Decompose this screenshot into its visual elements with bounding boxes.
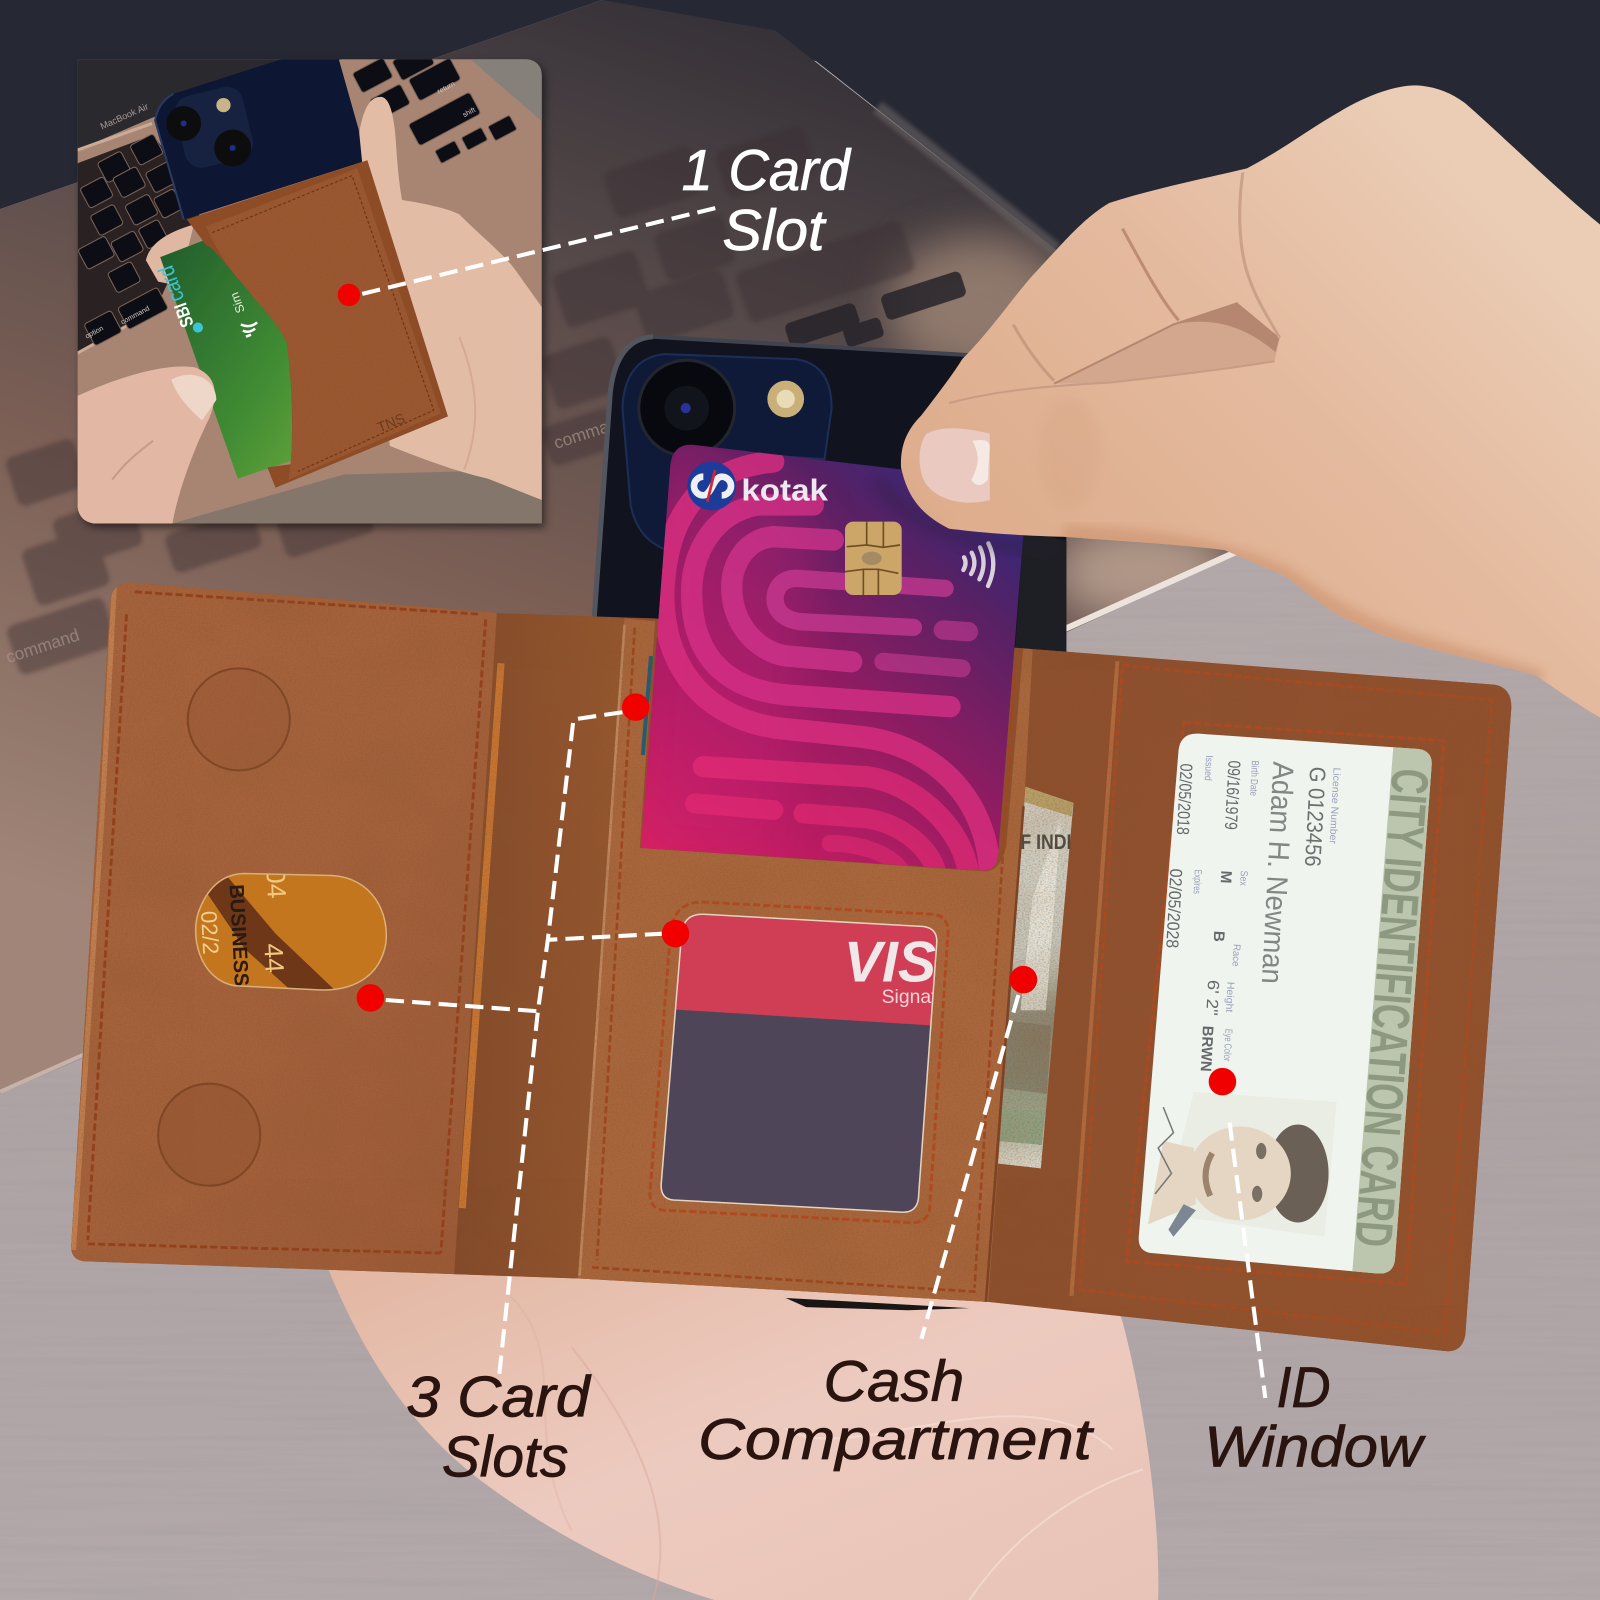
table	[172, 469, 542, 523]
keyboard keys	[78, 44, 517, 346]
green card: card	[153, 262, 189, 305]
finger behind card	[146, 224, 194, 286]
leather wallet: TNS	[375, 411, 408, 436]
ID card window: Adam H. Newman	[1255, 761, 1299, 985]
label: 1 Card Slot	[682, 139, 852, 263]
inset photo: 1 card slot: option	[84, 324, 105, 341]
visa card window: VISA	[844, 931, 977, 995]
ID card window: Eye Color	[1221, 1028, 1233, 1062]
inset photo: 1 card slot: command	[120, 304, 151, 326]
label: Cash Compartment	[698, 1350, 1094, 1472]
card in left flap oval: 02/2	[196, 910, 223, 955]
icon: thumbnail	[920, 428, 990, 503]
green card: SBI	[170, 300, 198, 330]
label: 3 Card Slots: Slots	[442, 1426, 568, 1490]
ID card window: BRWN	[1197, 1025, 1216, 1072]
leather texture	[474, 802, 1073, 1168]
label: Cash Compartment: Cash	[823, 1350, 964, 1414]
card in left flap oval	[194, 872, 388, 991]
inset photo: 1 card slot: shift	[461, 106, 477, 119]
photo	[1148, 1092, 1337, 1237]
ID card window: Birth Date	[1247, 760, 1260, 797]
panel: left flap	[61, 571, 497, 1276]
inset photo: 1 card slot: return	[436, 80, 456, 96]
panel: inner strip	[454, 613, 582, 1279]
ID card window: G 0123456	[1300, 766, 1330, 867]
label: 3 Card Slots	[406, 1365, 592, 1490]
ID card window: B	[1210, 930, 1227, 942]
label: ID Window	[1204, 1356, 1426, 1479]
callout: cash line	[921, 966, 1037, 1339]
icon: chip	[845, 522, 902, 595]
card in left flap oval: 04	[260, 868, 292, 899]
kotak card	[641, 445, 1026, 873]
panel: centre pocket	[578, 618, 1033, 1306]
label: ID Window: Window	[1204, 1415, 1426, 1479]
folded fingers	[1058, 322, 1279, 384]
label: 1 Card Slot: 1 Card	[682, 139, 852, 203]
green card	[153, 222, 327, 479]
ID card window: 6' 2"	[1202, 979, 1222, 1016]
phone behind the wallet	[594, 337, 1066, 653]
green card: Sim	[227, 290, 248, 315]
leather wallet	[184, 153, 454, 495]
ID card window: Race	[1229, 944, 1242, 967]
inset photo: 1 card slot	[78, 44, 542, 523]
kotak card: kotak	[741, 474, 829, 508]
icon: camera module	[622, 354, 832, 551]
label: ID Window: ID	[1277, 1356, 1331, 1420]
left hand	[78, 366, 215, 523]
icon: kotak logo	[687, 462, 736, 510]
callout: 3 card slots lines	[357, 693, 689, 1378]
upper hand pulling the card	[878, 71, 1600, 735]
right hand	[359, 97, 542, 500]
card in left flap oval: 44	[258, 943, 290, 974]
ID card window	[1122, 722, 1449, 1286]
icon: contactless	[963, 543, 993, 586]
callout: ID line	[1209, 1068, 1265, 1398]
cash note: F INDI	[1020, 830, 1071, 854]
background: laptop on table: command	[551, 410, 630, 453]
ID card window: Issued	[1202, 755, 1214, 781]
background: laptop on table: command	[3, 625, 82, 667]
wallet, opened	[61, 445, 1520, 1367]
inset photo: 1 card slot: MacBook Air	[99, 101, 150, 131]
ID card window: M	[1217, 870, 1234, 884]
callout: 1 card slot line	[338, 207, 719, 306]
visa card window	[650, 902, 977, 1223]
cash note	[995, 787, 1073, 1168]
flap edge highlight	[462, 663, 501, 1208]
ID card window: Sex	[1237, 870, 1249, 886]
phone bottom peeking below the wallet	[786, 1298, 969, 1310]
phone	[155, 59, 367, 219]
icon: embossed magnet upper	[188, 668, 290, 770]
icon: embossed magnet lower	[158, 1084, 260, 1186]
blue card edge	[643, 656, 651, 755]
label: 3 Card Slots: 3 Card	[406, 1365, 592, 1429]
thumb joint	[1037, 398, 1102, 510]
lower hand holding wallet	[327, 1265, 1158, 1600]
panel: right strip	[982, 648, 1080, 1305]
panel: right flap	[1071, 658, 1520, 1367]
thumb underside shade	[1063, 537, 1541, 682]
finger creases	[1122, 229, 1179, 320]
label: 1 Card Slot: Slot	[722, 199, 827, 263]
ID card window: 02/05/2018	[1173, 763, 1197, 835]
label: Cash Compartment: Compartment	[698, 1408, 1094, 1472]
ID card window: Expires	[1191, 869, 1203, 894]
ID card window: License Number	[1327, 767, 1342, 845]
ID card window: 09/16/1979	[1221, 760, 1245, 830]
ID card window: 02/05/2028	[1162, 868, 1186, 949]
visa card window: Signature	[882, 986, 965, 1008]
card in left flap oval: BUSINESS	[225, 884, 252, 987]
ID card window: CITY IDENTIFICATION CARD	[1343, 766, 1439, 1249]
ID card window: Height	[1223, 981, 1236, 1013]
